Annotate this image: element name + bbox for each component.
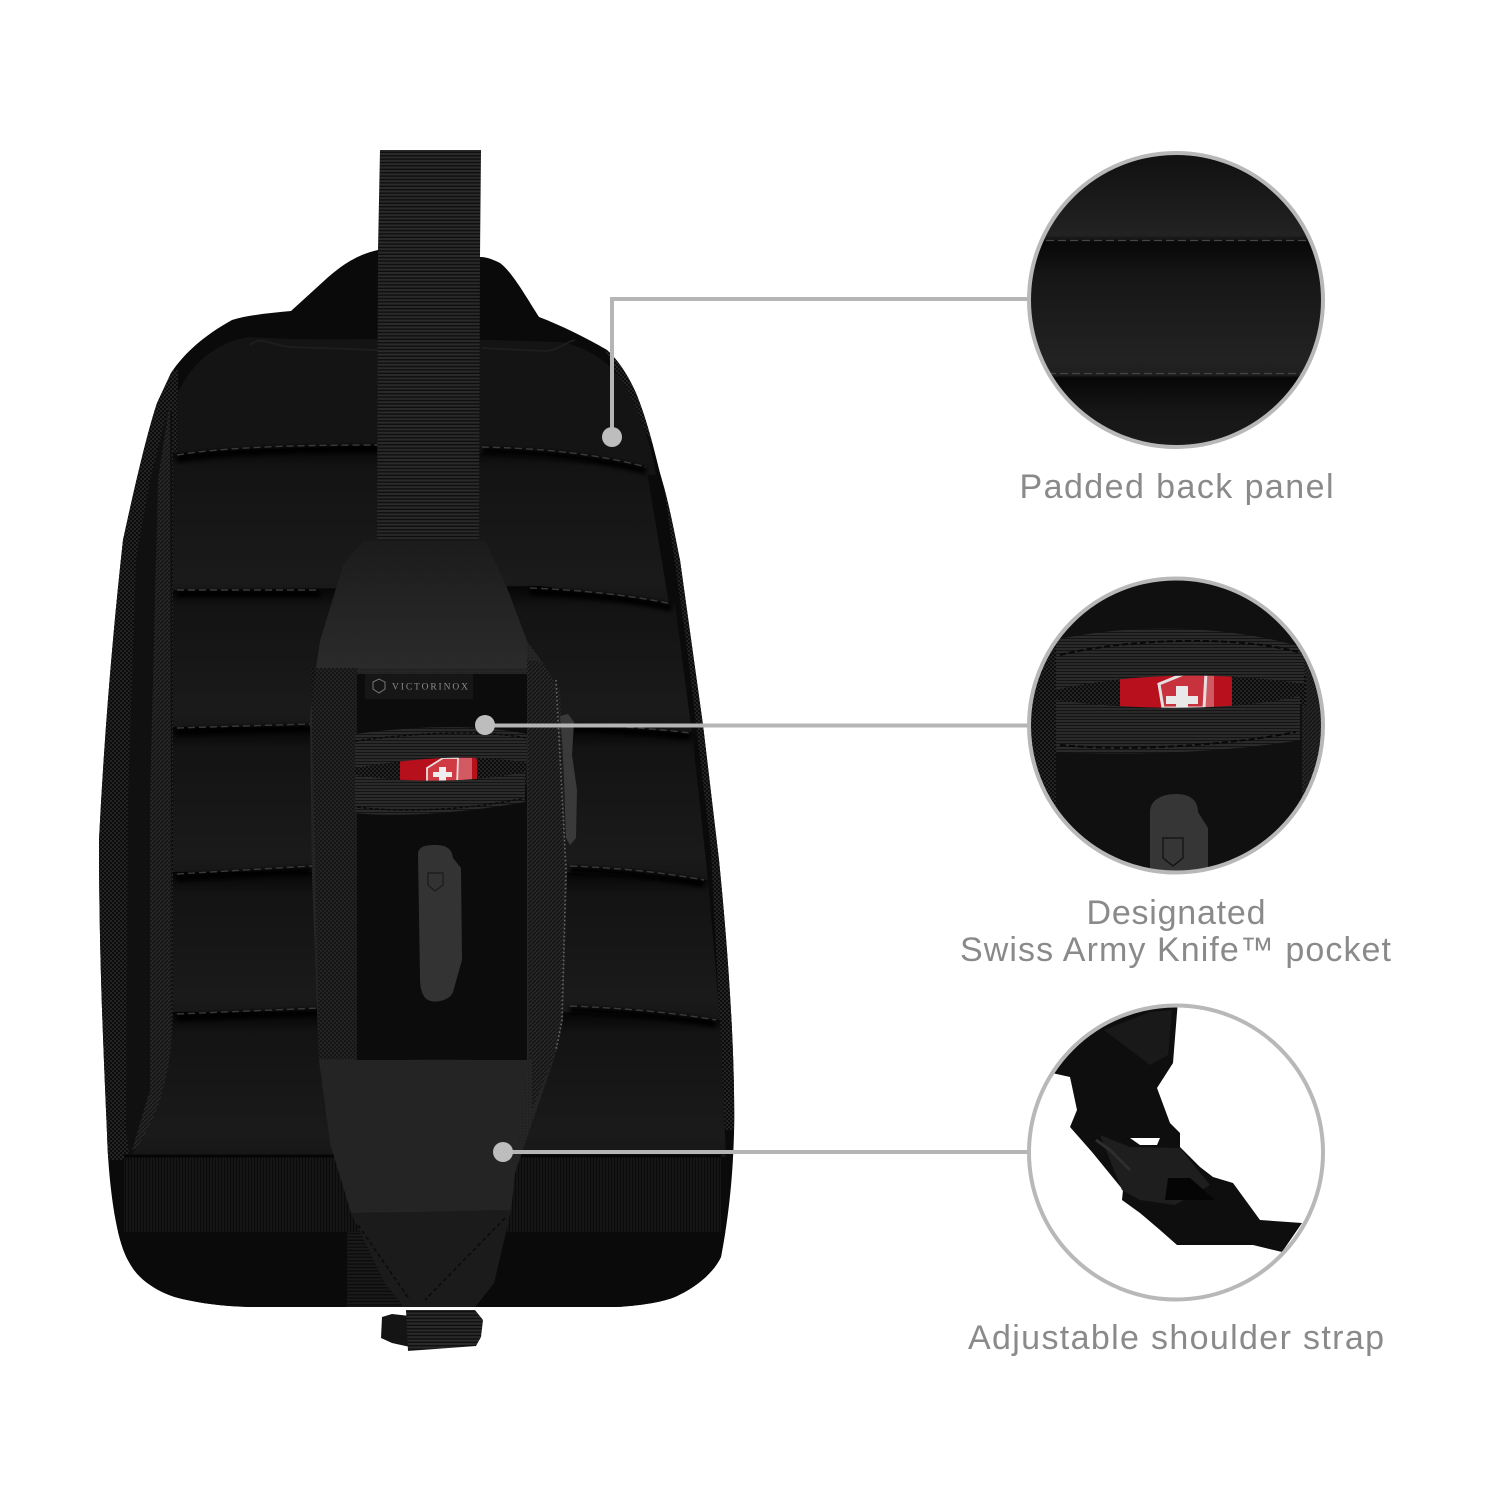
- callout line: shoulder strap: [493, 1142, 1030, 1162]
- ring hole: [1096, 1140, 1130, 1170]
- lower elastic band: [355, 772, 525, 815]
- knife imprint: [1150, 794, 1208, 870]
- left side dark band: [126, 410, 172, 1160]
- zipper pull: [560, 714, 577, 845]
- imprint logo: [1163, 838, 1183, 866]
- callout line: knife pocket: [475, 715, 1030, 735]
- buckle opening: [1130, 1138, 1160, 1145]
- stitched seams: [177, 445, 716, 1020]
- bag body: [99, 250, 734, 1307]
- upper elastic band: [355, 727, 527, 768]
- callout dot: [602, 427, 622, 447]
- back panel quilted sections: [130, 337, 726, 1157]
- caption: knife pocket: Swiss Army Knife™ pocket: [960, 931, 1392, 969]
- callout dot: [475, 715, 495, 735]
- buckle: [381, 1314, 410, 1347]
- buckle face: [1100, 1135, 1210, 1205]
- shoulder pad: [310, 541, 577, 1307]
- right side mesh edge: [604, 348, 734, 1130]
- strap tab and buckle: [381, 1310, 483, 1351]
- upper elastic: [1056, 629, 1304, 690]
- pad outer tape: [310, 541, 567, 1307]
- caption: knife pocket: [960, 894, 1392, 969]
- callout dot: [493, 1142, 513, 1162]
- knife slot mesh: [355, 755, 527, 785]
- side tapes: [1031, 644, 1056, 806]
- bag interior details: [99, 337, 734, 1307]
- circle ring: [1029, 1006, 1323, 1300]
- seam shadows: [177, 449, 716, 1024]
- callout line: padded back panel: [602, 299, 1030, 447]
- elastic stitching: [355, 733, 527, 810]
- zipper line: [556, 680, 566, 1050]
- strap and buckle silhouette: [1040, 1000, 1302, 1252]
- top panel piping: [250, 340, 575, 351]
- pocket label: [365, 674, 473, 699]
- product: sling bag back view: [99, 150, 734, 1351]
- circle ring: [1029, 153, 1323, 447]
- buckle detail: [1040, 1000, 1302, 1252]
- pad upper fabric: [316, 541, 527, 668]
- caption: shoulder strap: Adjustable shoulder strap: [968, 1319, 1384, 1357]
- left side twill band: [132, 400, 172, 1150]
- caption: knife pocket: Designated: [1086, 894, 1266, 932]
- detail circle: padded back panel: [1029, 153, 1323, 447]
- lower vertical webbing: [347, 1232, 407, 1308]
- x stitching: [358, 1218, 505, 1300]
- circle ring: [1029, 578, 1323, 872]
- pocket panel: [357, 674, 527, 1060]
- swiss cross: [1166, 686, 1198, 708]
- caption: padded back panel: Padded back panel: [1020, 468, 1334, 506]
- top webbing strap: [377, 150, 481, 540]
- detail circle: shoulder strap buckle: [1029, 1000, 1323, 1300]
- swiss cross: [433, 767, 452, 785]
- red knife in slot: [400, 757, 477, 785]
- seam stitches: [1046, 240, 1310, 374]
- tab webbing: [406, 1310, 483, 1351]
- bottom lower block: [118, 1232, 726, 1307]
- label text: VICTORINOX: [392, 682, 468, 692]
- red knife: [1120, 673, 1232, 708]
- knife outline imprint: [418, 845, 462, 1002]
- imprint logo: [428, 873, 443, 891]
- left side mesh strip: [99, 370, 178, 1160]
- buckle slot: [1165, 1178, 1215, 1200]
- label logo: [373, 679, 385, 693]
- detail circle: knife pocket: [1028, 575, 1328, 880]
- pad nylon: [1104, 1010, 1172, 1065]
- slot mesh: [1056, 675, 1306, 705]
- bottom band stitches: [124, 1154, 721, 1158]
- lower pad fabric: [321, 1060, 528, 1210]
- shield: [427, 758, 458, 785]
- elastic stitching: [1060, 641, 1298, 748]
- shield: [1159, 673, 1206, 708]
- left tape: [311, 668, 357, 1059]
- bottom webbing band: [124, 1157, 721, 1232]
- right twill tape: [527, 660, 567, 1110]
- pocket detail: [1031, 628, 1321, 870]
- pad lower stitched tip: [351, 1210, 511, 1307]
- lower elastic: [1056, 696, 1300, 754]
